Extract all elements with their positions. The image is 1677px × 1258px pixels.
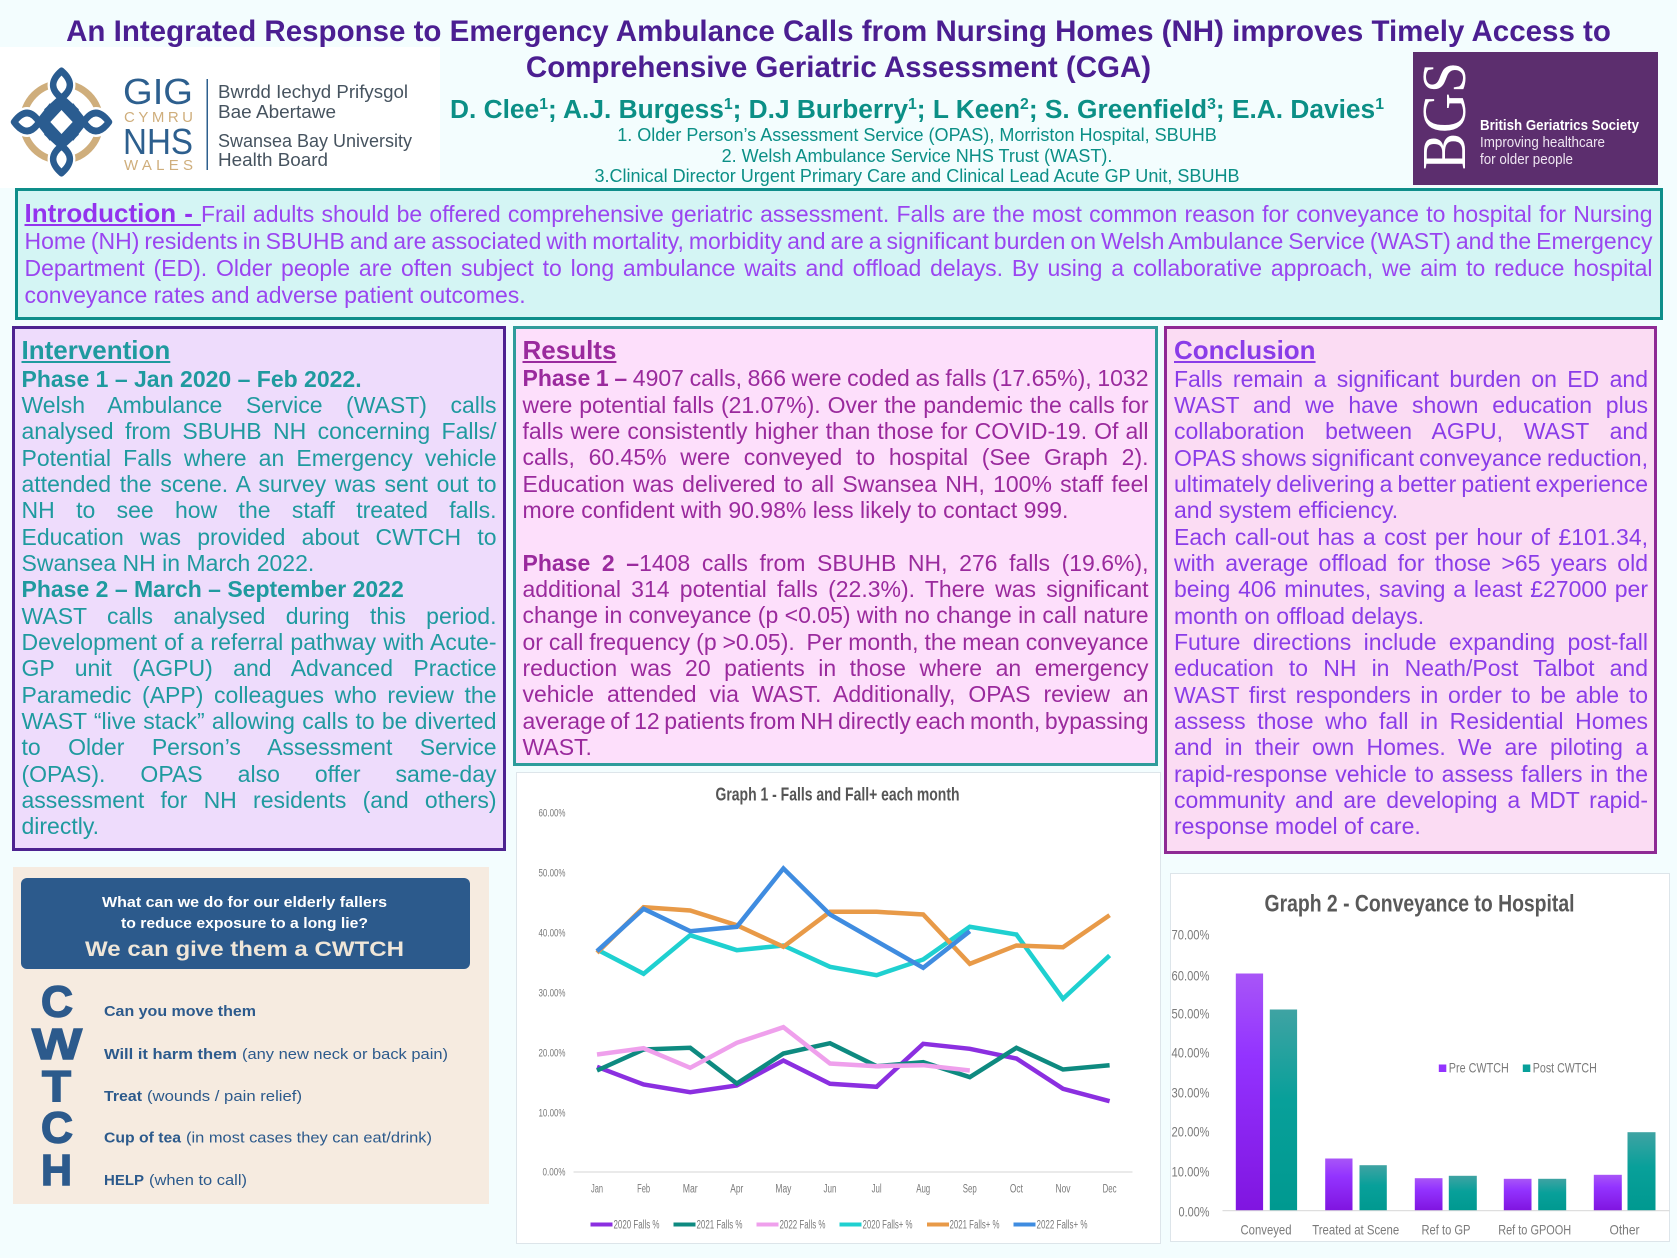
results text: calls, 60.45% were conveyed to hospital (See Graph 2). [522, 444, 1148, 470]
intervention text: WAST “live stack” allowing calls to be diverted [22, 708, 496, 734]
CWTCH letters [32, 978, 83, 1195]
graph 1 x axis: Jun [824, 1184, 836, 1196]
CWTCH letters: H [41, 1146, 72, 1195]
conclusion text: OPAS shows significant conveyance reduction, [1174, 445, 1648, 471]
graph 2 y axis: 20.00% [1172, 1124, 1210, 1140]
conclusion text: WAST first responders in order to be able to [1174, 682, 1648, 708]
graph 2 x axis: Ref to GPOOH [1498, 1222, 1571, 1238]
panel: results [513, 326, 1158, 766]
conclusion text: education to NH in Neath/Post Talbot and [1174, 655, 1648, 681]
intervention text: Potential Falls where an Emergency vehicle [22, 445, 496, 471]
graph 2 bars [1236, 974, 1656, 1210]
conclusion text: Each call-out has a cost per hour of £101.34, [1174, 524, 1648, 550]
CWTCH letters: W [32, 1020, 83, 1069]
graph 1 y axis [538, 808, 566, 1178]
CWTCH items: (when to call) [149, 1173, 247, 1189]
intervention text: Development of a referral pathway with Acute- [22, 629, 496, 655]
CWTCH header: What can we do for our elderly fallers [102, 894, 387, 911]
results text: average of 12 patients from NH directly each month, bypassing [522, 708, 1148, 734]
logo: Swansea Bay University Health Board: Swansea Bay University [218, 131, 412, 151]
intervention text: analysed from SBUHB NH concerning Falls/ [22, 418, 496, 444]
logo: British Geriatrics Society: Improving healthcare [1480, 134, 1605, 151]
graph 1 x axis: Dec [1103, 1184, 1117, 1196]
logo: Swansea Bay University Health Board: WALES [124, 157, 193, 174]
conclusion text: community and are developing a MDT rapid- [1174, 787, 1648, 813]
results text: or call frequency (p >0.05). Per month, the mean conveyance [522, 629, 1148, 655]
introduction text [24, 198, 1652, 308]
graph 2 y axis [1172, 926, 1210, 1220]
CWTCH items: Will it harm them [104, 1047, 237, 1063]
logo: Swansea Bay University Health Board: Health Board [218, 150, 328, 170]
graph 2 x axis: Conveyed [1240, 1222, 1292, 1238]
affiliations: 1. Older Person’s Assessment Service (OPAS), Morriston Hospital, SBUHB [617, 125, 1217, 145]
CWTCH items: (any new neck or back pain) [242, 1047, 448, 1063]
graph 1 x axis: Sep [963, 1184, 977, 1196]
introduction text: Department (ED). Older people are often subject to long ambulance waits and offload delays. By using a collaborative approach, we aim to reduce hospital [24, 255, 1652, 281]
panel: CWTCH [13, 867, 489, 1204]
graph 1 x axis: Apr [730, 1184, 743, 1196]
conclusion text: ultimately delivering a better patient experience [1174, 471, 1648, 497]
logo: British Geriatrics Society: British Geriatrics Society [1480, 117, 1640, 134]
chart: graph 2 conveyance to hospital [1170, 873, 1670, 1242]
logo: Swansea Bay University Health Board: GIG [123, 71, 193, 112]
conclusion text: WAST and we have shown education plus [1174, 392, 1648, 418]
graph 1 y axis: 0.00% [542, 1166, 566, 1178]
graph 2 legend [1439, 1060, 1597, 1076]
CWTCH items: Treat [104, 1089, 142, 1105]
graph 2 y axis: 50.00% [1172, 1006, 1210, 1022]
graph 1 x axis: Nov [1056, 1184, 1071, 1196]
graph 1 title: Graph 1 - Falls and Fall+ each month [716, 784, 960, 804]
CWTCH items: Cup of tea [104, 1130, 182, 1146]
graph 2 title: Graph 2 - Conveyance to Hospital [1264, 890, 1574, 918]
graph 1 x axis: May [775, 1184, 792, 1196]
CWTCH header [21, 878, 470, 969]
logo: British Geriatrics Society [1413, 52, 1658, 185]
intervention text [22, 366, 496, 839]
CWTCH items: Can you move them [104, 1004, 256, 1020]
title: Comprehensive Geriatric Assessment (CGA) [526, 51, 1151, 84]
graph 2 y axis: 30.00% [1172, 1084, 1210, 1100]
introduction text: Home (NH) residents in SBUHB and are associated with mortality, morbidity and are a significant burden on Welsh Ambulance Service (WAST) and the Emergency [24, 228, 1652, 254]
results text: Phase 1 – 4907 calls, 866 were coded as falls (17.65%), 1032 [522, 365, 1148, 391]
conclusion text: and system efficiency. [1174, 497, 1398, 523]
graph 1 legend: 2022 Falls % [780, 1220, 826, 1232]
graph 1 legend: 2021 Falls % [696, 1220, 742, 1232]
conclusion text: being 406 minutes, saving a least £27000 per [1174, 576, 1648, 602]
graph 1 y axis: 40.00% [538, 928, 566, 940]
title: An Integrated Response to Emergency Ambulance Calls from Nursing Homes (NH) improves Timely Access to [66, 15, 1611, 48]
CWTCH items: HELP [104, 1173, 144, 1189]
results text: were potential falls (21.07%). Over the pandemic the calls for [522, 392, 1148, 418]
logo: Swansea Bay University Health Board: Bwrdd Iechyd Prifysgol [218, 82, 408, 102]
CWTCH letters: C [41, 978, 73, 1026]
graph 1 lines [597, 868, 1110, 1101]
results text: Education was delivered to all Swansea NH, 100% staff feel [522, 471, 1148, 497]
results text [522, 365, 1148, 760]
intervention text: Paramedic (APP) colleagues who review the [22, 682, 496, 708]
logo: Swansea Bay University Health Board: CYMRU [124, 109, 193, 126]
intervention text: Education was provided about CWTCH to [22, 524, 496, 550]
introduction text: conveyance rates and adverse patient outcomes. [24, 282, 526, 308]
intervention text: GP unit (AGPU) and Advanced Practice [22, 655, 496, 681]
affiliations [594, 125, 1240, 186]
intervention text: WAST calls analysed during this period. [22, 603, 496, 629]
graph 2 x axis: Ref to GP [1422, 1222, 1470, 1238]
graph 1 legend: 2022 Falls+ % [1036, 1220, 1088, 1232]
graph 1 x axis: Oct [1010, 1184, 1023, 1196]
conclusion text: Falls remain a significant burden on ED and [1174, 366, 1648, 392]
graph 2 x axis [1240, 1222, 1640, 1238]
panel: intervention [12, 326, 506, 851]
introduction text: Introduction - Frail adults should be offered comprehensive geriatric assessment. Falls are the most common reason for conveyance to hospital for Nursing [24, 198, 1652, 228]
logo: Swansea Bay University Health Board: NHS [123, 121, 193, 162]
CWTCH items: (in most cases they can eat/drink) [186, 1130, 432, 1146]
graph 1 x axis: Jul [872, 1184, 882, 1196]
heading: conclusion: Conclusion [1174, 334, 1316, 364]
CWTCH items [104, 1004, 448, 1189]
results text: additional 314 potential falls (22.3%). There was significant [522, 576, 1148, 602]
graph 2 legend: Pre CWTCH [1449, 1060, 1509, 1076]
intervention text: (OPAS). OPAS also offer same-day [22, 761, 496, 787]
graph 1 y axis: 10.00% [538, 1108, 566, 1120]
results text: more confident with 90.98% less likely to contact 999. [522, 497, 1068, 523]
conclusion text: with average offload for those >65 years old [1174, 550, 1648, 576]
graph 1 legend: 2021 Falls+ % [950, 1220, 1000, 1232]
heading: results: Results [522, 334, 616, 364]
graph 1 legend [590, 1220, 1088, 1232]
results text: reduction was 20 patients in those where an emergency [522, 655, 1148, 681]
graph 1 x axis: Mar [683, 1184, 698, 1196]
logo: British Geriatrics Society: for older people [1480, 151, 1573, 168]
intervention text: assessment for NH residents (and others) [22, 787, 496, 813]
title [66, 15, 1611, 84]
intervention text: attended the scene. A survey was sent out to [22, 471, 496, 497]
graph 1 y axis: 60.00% [538, 808, 566, 820]
logo: British Geriatrics Society: BGS [1411, 62, 1479, 170]
conclusion text: month on offload delays. [1174, 603, 1424, 629]
panel: introduction [15, 188, 1663, 320]
graph 1 legend: 2020 Falls+ % [862, 1220, 912, 1232]
conclusion text [1174, 366, 1648, 839]
affiliations: 3.Clinical Director Urgent Primary Care and Clinical Lead Acute GP Unit, SBUHB [594, 166, 1240, 186]
conclusion text: rapid-response vehicle to assess fallers in the [1174, 761, 1648, 787]
graph 2 x axis: Other [1610, 1222, 1640, 1238]
chart: graph 1 falls each month [516, 772, 1161, 1244]
intervention text: Phase 2 – March – September 2022 [22, 576, 404, 602]
results text: change in conveyance (p <0.05) with no change in call nature [522, 602, 1148, 628]
graph 1 y axis: 30.00% [538, 988, 566, 1000]
intervention text: directly. [22, 813, 99, 839]
CWTCH letters: T [42, 1062, 71, 1111]
results text: vehicle attended via WAST. Additionally, OPAS review an [522, 681, 1148, 707]
intervention text: Swansea NH in March 2022. [22, 550, 314, 576]
graph 2 legend: Post CWTCH [1533, 1060, 1597, 1076]
graph 1 x axis: Aug [916, 1184, 930, 1196]
results text: Phase 2 –1408 calls from SBUHB NH, 276 falls (19.6%), [522, 550, 1148, 576]
graph 2 x axis: Treated at Scene [1312, 1222, 1399, 1238]
results text: WAST. [522, 734, 592, 760]
conclusion text: assess those who fall in Residential Homes [1174, 708, 1648, 734]
intervention text: to Older Person’s Assessment Service [22, 734, 496, 760]
conclusion text: response model of care. [1174, 813, 1421, 839]
graph 1 legend: 2020 Falls % [614, 1220, 660, 1232]
logo: Swansea Bay University Health Board: Bae Abertawe [218, 102, 336, 122]
graph 2 y axis: 10.00% [1172, 1164, 1210, 1180]
graph 2 y axis: 60.00% [1172, 968, 1210, 984]
graph 1 x axis [591, 1184, 1117, 1196]
graph 2 y axis: 0.00% [1178, 1204, 1210, 1220]
CWTCH letters: C [41, 1104, 73, 1152]
panel: conclusion [1164, 326, 1657, 854]
graph 1 x axis: Feb [637, 1184, 650, 1196]
graph 2 y axis: 40.00% [1172, 1044, 1210, 1060]
affiliations: 2. Welsh Ambulance Service NHS Trust (WAST). [722, 146, 1112, 166]
results text: falls were consistently higher than those for COVID-19. Of all [522, 418, 1148, 444]
CWTCH header: We can give them a CWTCH [85, 938, 404, 961]
conclusion text: collaboration between AGPU, WAST and [1174, 418, 1648, 444]
graph 1 x axis: Jan [591, 1184, 603, 1196]
intervention text: NH to see how the staff treated falls. [22, 497, 496, 523]
intervention text: Phase 1 – Jan 2020 – Feb 2022. [22, 366, 362, 392]
conclusion text: and in their own Homes. We are piloting a [1174, 734, 1648, 760]
graph 2 y axis: 70.00% [1172, 926, 1210, 942]
authors: D. Clee1; A.J. Burgess1; D.J Burberry1; L Keen2; S. Greenfield3; E.A. Davies1 [450, 94, 1384, 124]
logo: Swansea Bay University Health Board [0, 47, 440, 188]
intervention text: Welsh Ambulance Service (WAST) calls [22, 392, 496, 418]
conclusion text: Future directions include expanding post-fall [1174, 629, 1648, 655]
graph 1 y axis: 50.00% [538, 868, 566, 880]
CWTCH items: (wounds / pain relief) [147, 1089, 302, 1105]
graph 1 y axis: 20.00% [538, 1048, 566, 1060]
heading: intervention: Intervention [22, 334, 170, 364]
CWTCH header: to reduce exposure to a long lie? [121, 915, 368, 932]
